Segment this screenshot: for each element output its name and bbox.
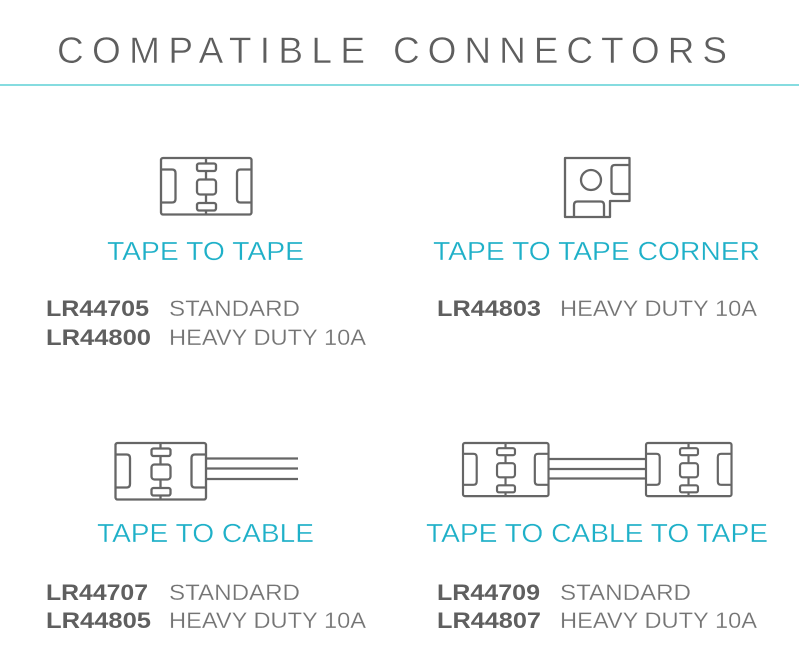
part list: tape to tape: LR44705 [46,296,149,321]
part list: tape to cable to tape [437,580,757,633]
heading: tape to tape: TAPE TO TAPE [107,236,304,266]
part list: tape to cable [46,580,366,633]
heading: tape to tape corner: TAPE TO TAPE CORNER [433,236,760,266]
part list: tape to tape [46,296,366,350]
part list: tape to cable: LR44805 [46,608,151,633]
icon: tape to cable to tape connector [463,443,732,496]
part list: tape to tape: HEAVY DUTY 10A [169,325,366,350]
title: COMPATIBLE [57,30,365,71]
part list: tape to cable to tape: LR44709 [437,580,540,605]
part list: tape to cable: STANDARD [169,580,300,605]
panel: tape to tape corner [433,158,760,321]
title [57,30,727,71]
heading: tape to cable: TAPE TO CABLE [97,518,314,548]
part list: tape to cable: HEAVY DUTY 10A [169,608,366,633]
panel: tape to cable to tape [426,443,768,633]
part list: tape to tape: STANDARD [169,296,300,321]
part list: tape to cable to tape: HEAVY DUTY 10A [560,608,757,633]
part list: tape to tape: LR44800 [46,325,151,350]
part list: tape to tape corner [437,296,757,321]
icon: tape to cable connector [116,443,298,500]
part list: tape to tape corner: HEAVY DUTY 10A [560,296,757,321]
icon: tape to tape connector [161,158,252,214]
icon: corner connector [565,158,630,217]
heading: tape to cable to tape: TAPE TO CABLE TO TAPE [426,518,768,548]
part list: tape to cable to tape: STANDARD [560,580,691,605]
part list: tape to tape corner: LR44803 [437,296,541,321]
panel: tape to cable [46,443,366,633]
part list: tape to cable to tape: LR44807 [437,608,541,633]
panel: tape to tape [46,158,366,350]
title: CONNECTORS [393,30,727,71]
part list: tape to cable: LR44707 [46,580,148,605]
